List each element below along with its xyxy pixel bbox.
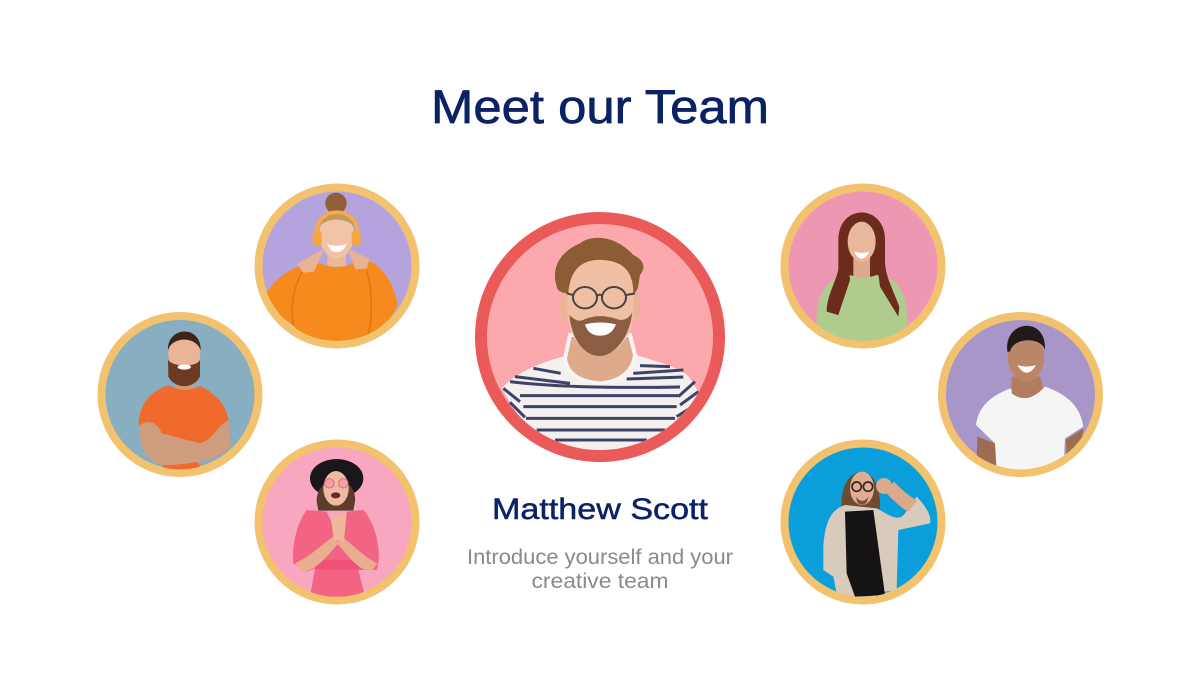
avatar: man with long hair and glasses on blue background bbox=[784, 444, 942, 600]
name: Matthew Scott bbox=[492, 493, 709, 526]
avatar: man in white t-shirt bbox=[942, 316, 1099, 473]
avatar: center man in striped shirt with glasses bbox=[481, 218, 719, 456]
description: Introduce yourself and your bbox=[467, 546, 733, 569]
avatar: woman in orange sweater with headphones bbox=[258, 188, 416, 344]
avatar: bearded man in orange t-shirt bbox=[102, 316, 258, 473]
description: creative team bbox=[532, 570, 668, 593]
avatar: woman in green sweater bbox=[784, 188, 942, 344]
title: Meet our Team bbox=[431, 80, 769, 133]
avatar: woman in pink dress with black hat bbox=[258, 444, 416, 600]
